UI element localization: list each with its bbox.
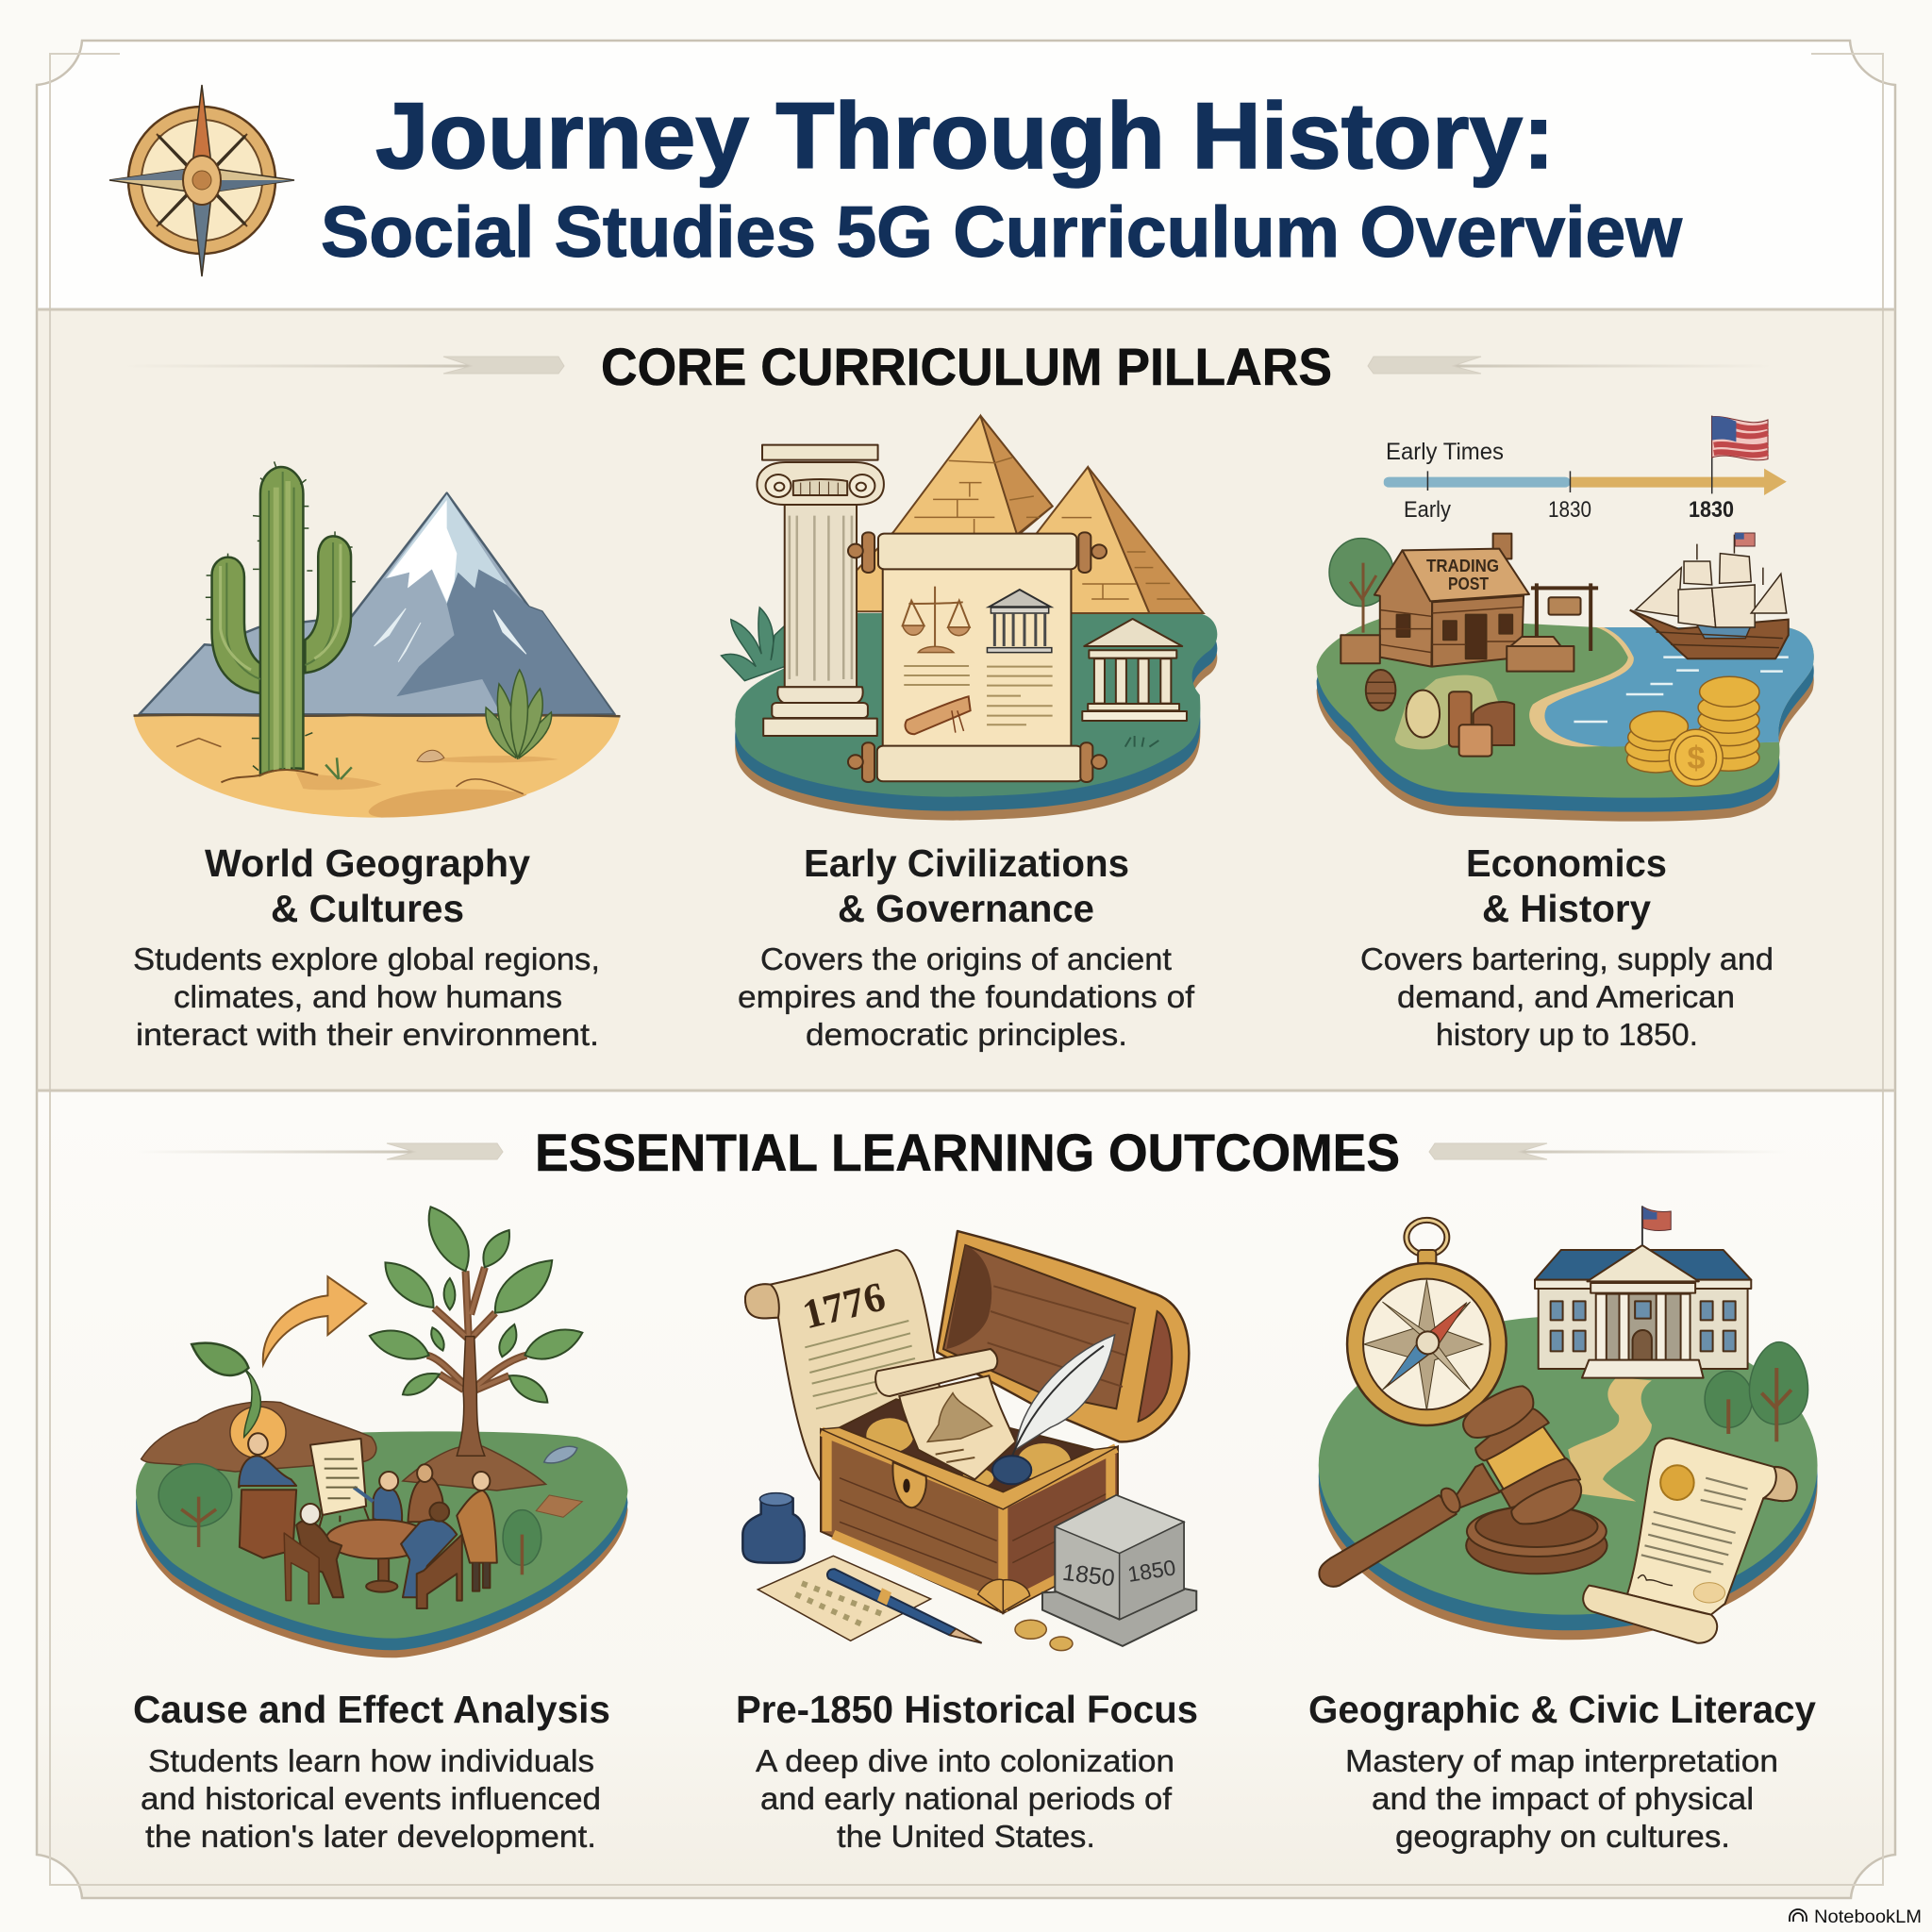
card description: history up to 1850. [1436,1017,1698,1052]
card description [756,1743,1174,1854]
card description: and the impact of physical [1372,1781,1754,1816]
card description: Covers the origins of ancient [760,941,1172,976]
card description: and early national periods of [760,1781,1173,1816]
card description: A deep dive into colonization [756,1743,1174,1778]
timeline: Early [1404,497,1451,523]
trading post island: POST [1448,575,1489,593]
icon: treasure chest with scrolls: 1776 [798,1274,890,1338]
card description: interact with their environment. [136,1017,599,1052]
card description: climates, and how humans [174,979,562,1014]
icon: treasure chest with scrolls: 1850 [1061,1559,1116,1591]
card description: geography on cultures. [1395,1819,1730,1854]
title: Journey Through History: [375,83,1555,188]
card heading [804,841,1129,930]
card description: Students explore global regions, [133,941,600,976]
card heading [1466,841,1667,930]
watermark: NotebookLM: NotebookLM [1814,1907,1922,1927]
card heading: & Governance [838,887,1094,930]
section heading: essential learning outcomes: ESSENTIAL LEARNING OUTCOMES [535,1123,1400,1182]
card description [1345,1743,1778,1854]
card description: and historical events influenced [141,1781,601,1816]
section heading: core curriculum pillars: CORE CURRICULUM PILLARS [601,337,1332,396]
icon: cactus and mountain [134,461,621,818]
card description: the nation's later development. [145,1819,596,1854]
timeline: 1830 [1689,497,1734,523]
card heading: Early Civilizations [804,841,1129,885]
card heading: World Geography [205,841,530,885]
card heading: Cause and Effect Analysis [133,1688,610,1731]
card heading: Economics [1466,841,1667,885]
card description: Students learn how individuals [148,1743,594,1778]
trading post island [1317,533,1814,822]
card: economics and history [1317,416,1814,1052]
card heading [205,841,530,930]
header panel [109,83,1683,276]
icon: compass rose [109,85,294,276]
card heading: Pre-1850 Historical Focus [736,1688,1198,1731]
timeline [1384,416,1787,523]
card description: the United States. [837,1819,1095,1854]
card heading: Geographic & Civic Literacy [1308,1688,1816,1731]
card description [1360,941,1774,1052]
card description [141,1743,601,1854]
card description: Covers bartering, supply and [1360,941,1774,976]
icon: column, pyramids and scroll [722,416,1217,821]
icon: seed, tree and meeting [136,1207,627,1657]
card: pre-1850 historical focus [736,1231,1198,1854]
section heading: essential learning outcomes [136,1123,1787,1182]
trading post island: $ [1688,741,1706,776]
card description [738,941,1195,1052]
icon: compass, capitol, gavel and charter [1319,1206,1818,1643]
title: Social Studies 5G Curriculum Overview [321,192,1683,273]
card: geographic and civic literacy [1308,1206,1818,1854]
section heading: core curriculum pillars [123,337,1774,396]
card: cause and effect analysis [133,1207,627,1854]
panel: core curriculum pillars [123,337,1814,1052]
icon: treasure chest with scrolls: 1850 [1125,1555,1177,1587]
card description: Mastery of map interpretation [1345,1743,1778,1778]
card heading: & Cultures [271,887,464,930]
card description: demand, and American [1397,979,1735,1014]
card description [133,941,600,1052]
card heading: & History [1482,887,1651,930]
title [321,83,1683,273]
icon: timeline, trading post, ship and coins [1317,416,1814,822]
trading post island: TRADING [1426,557,1499,575]
card description: empires and the foundations of [738,979,1195,1014]
card description: democratic principles. [806,1017,1127,1052]
timeline: 1830 [1548,497,1591,523]
card: world geography and cultures [133,461,621,1052]
timeline: Early Times [1386,439,1504,465]
panel: essential learning outcomes [133,1123,1818,1854]
card: early civilizations and governance [722,416,1217,1052]
icon: treasure chest with scrolls [742,1231,1196,1651]
